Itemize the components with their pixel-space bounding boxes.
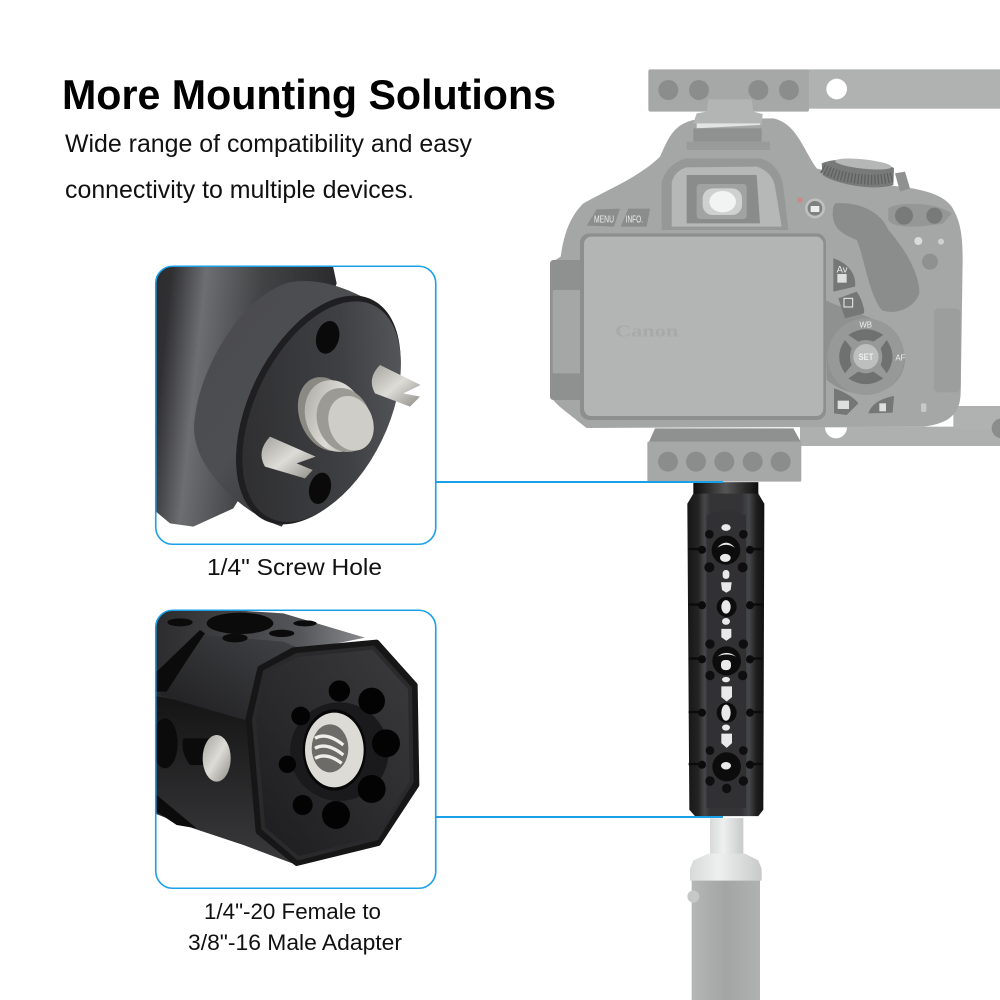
- control wheel: WB: [859, 319, 872, 329]
- side buttons: [833, 258, 926, 415]
- rear body: [150, 260, 337, 527]
- control wheel: [825, 300, 905, 395]
- textured grip: [833, 203, 919, 312]
- centre screw: [298, 377, 374, 452]
- threaded insert: [303, 709, 366, 791]
- centre channel: [707, 511, 746, 808]
- handle and stand: [687, 482, 764, 1000]
- side screw: [203, 735, 231, 782]
- caption: screw hole: 1/4" Screw Hole: [207, 554, 382, 580]
- side door: [934, 308, 961, 392]
- lower side of adapter body: [150, 695, 297, 865]
- barrel: [194, 281, 362, 527]
- side slots: [689, 546, 763, 769]
- menu and info buttons: INFO.: [626, 215, 643, 226]
- frame: adapter panel: [156, 610, 436, 888]
- locating pins: [261, 365, 421, 478]
- end cap: [248, 642, 417, 863]
- bottom rail: [800, 406, 1000, 446]
- threaded holes: [316, 321, 340, 354]
- camera in cage, ghosted: [550, 69, 1000, 482]
- hot shoe: [687, 99, 770, 150]
- top plane of adapter body: [156, 611, 365, 700]
- mounting face rim: [236, 296, 401, 524]
- live view button: [797, 197, 825, 218]
- connector line to top of handle: [436, 481, 723, 483]
- mounting face: [242, 301, 401, 522]
- description text: Wide range of compatibility and easy: [65, 130, 472, 158]
- upper side band: [158, 635, 303, 720]
- caption: adapter: 3/8"-16 Male Adapter: [188, 930, 402, 955]
- AE and AF buttons: [888, 204, 952, 270]
- panel: screw hole detail: [156, 267, 420, 527]
- handle body: [687, 494, 764, 816]
- top holes: [152, 613, 317, 828]
- control wheel: SET: [859, 352, 874, 362]
- control wheel: AF: [895, 353, 905, 363]
- bottom plate: [647, 428, 802, 482]
- caption: adapter: 1/4"-20 Female to: [204, 899, 381, 924]
- frame: screw hole panel: [156, 266, 436, 544]
- description text: connectivity to multiple devices.: [65, 176, 414, 204]
- LCD screen: [580, 233, 826, 420]
- light stand, ghosted: [687, 818, 762, 1000]
- LCD screen: Canon: [615, 322, 679, 341]
- panel: adapter detail: [150, 605, 417, 865]
- connector line to bottom of handle: [436, 816, 723, 818]
- white through-holes: [704, 524, 748, 793]
- top rail: [648, 69, 1000, 112]
- description text: [65, 130, 472, 204]
- camera body: [550, 118, 963, 428]
- top collar: [693, 482, 758, 504]
- menu and info buttons: MENU: [594, 215, 614, 226]
- menu and info buttons: [587, 209, 650, 227]
- hole ring: [279, 680, 400, 829]
- caption: adapter: [188, 899, 402, 955]
- left hinge: [550, 260, 583, 400]
- side buttons: Av: [837, 264, 848, 274]
- title: More Mounting Solutions: [62, 71, 556, 118]
- mode dial: [822, 156, 910, 192]
- viewfinder: [662, 158, 788, 230]
